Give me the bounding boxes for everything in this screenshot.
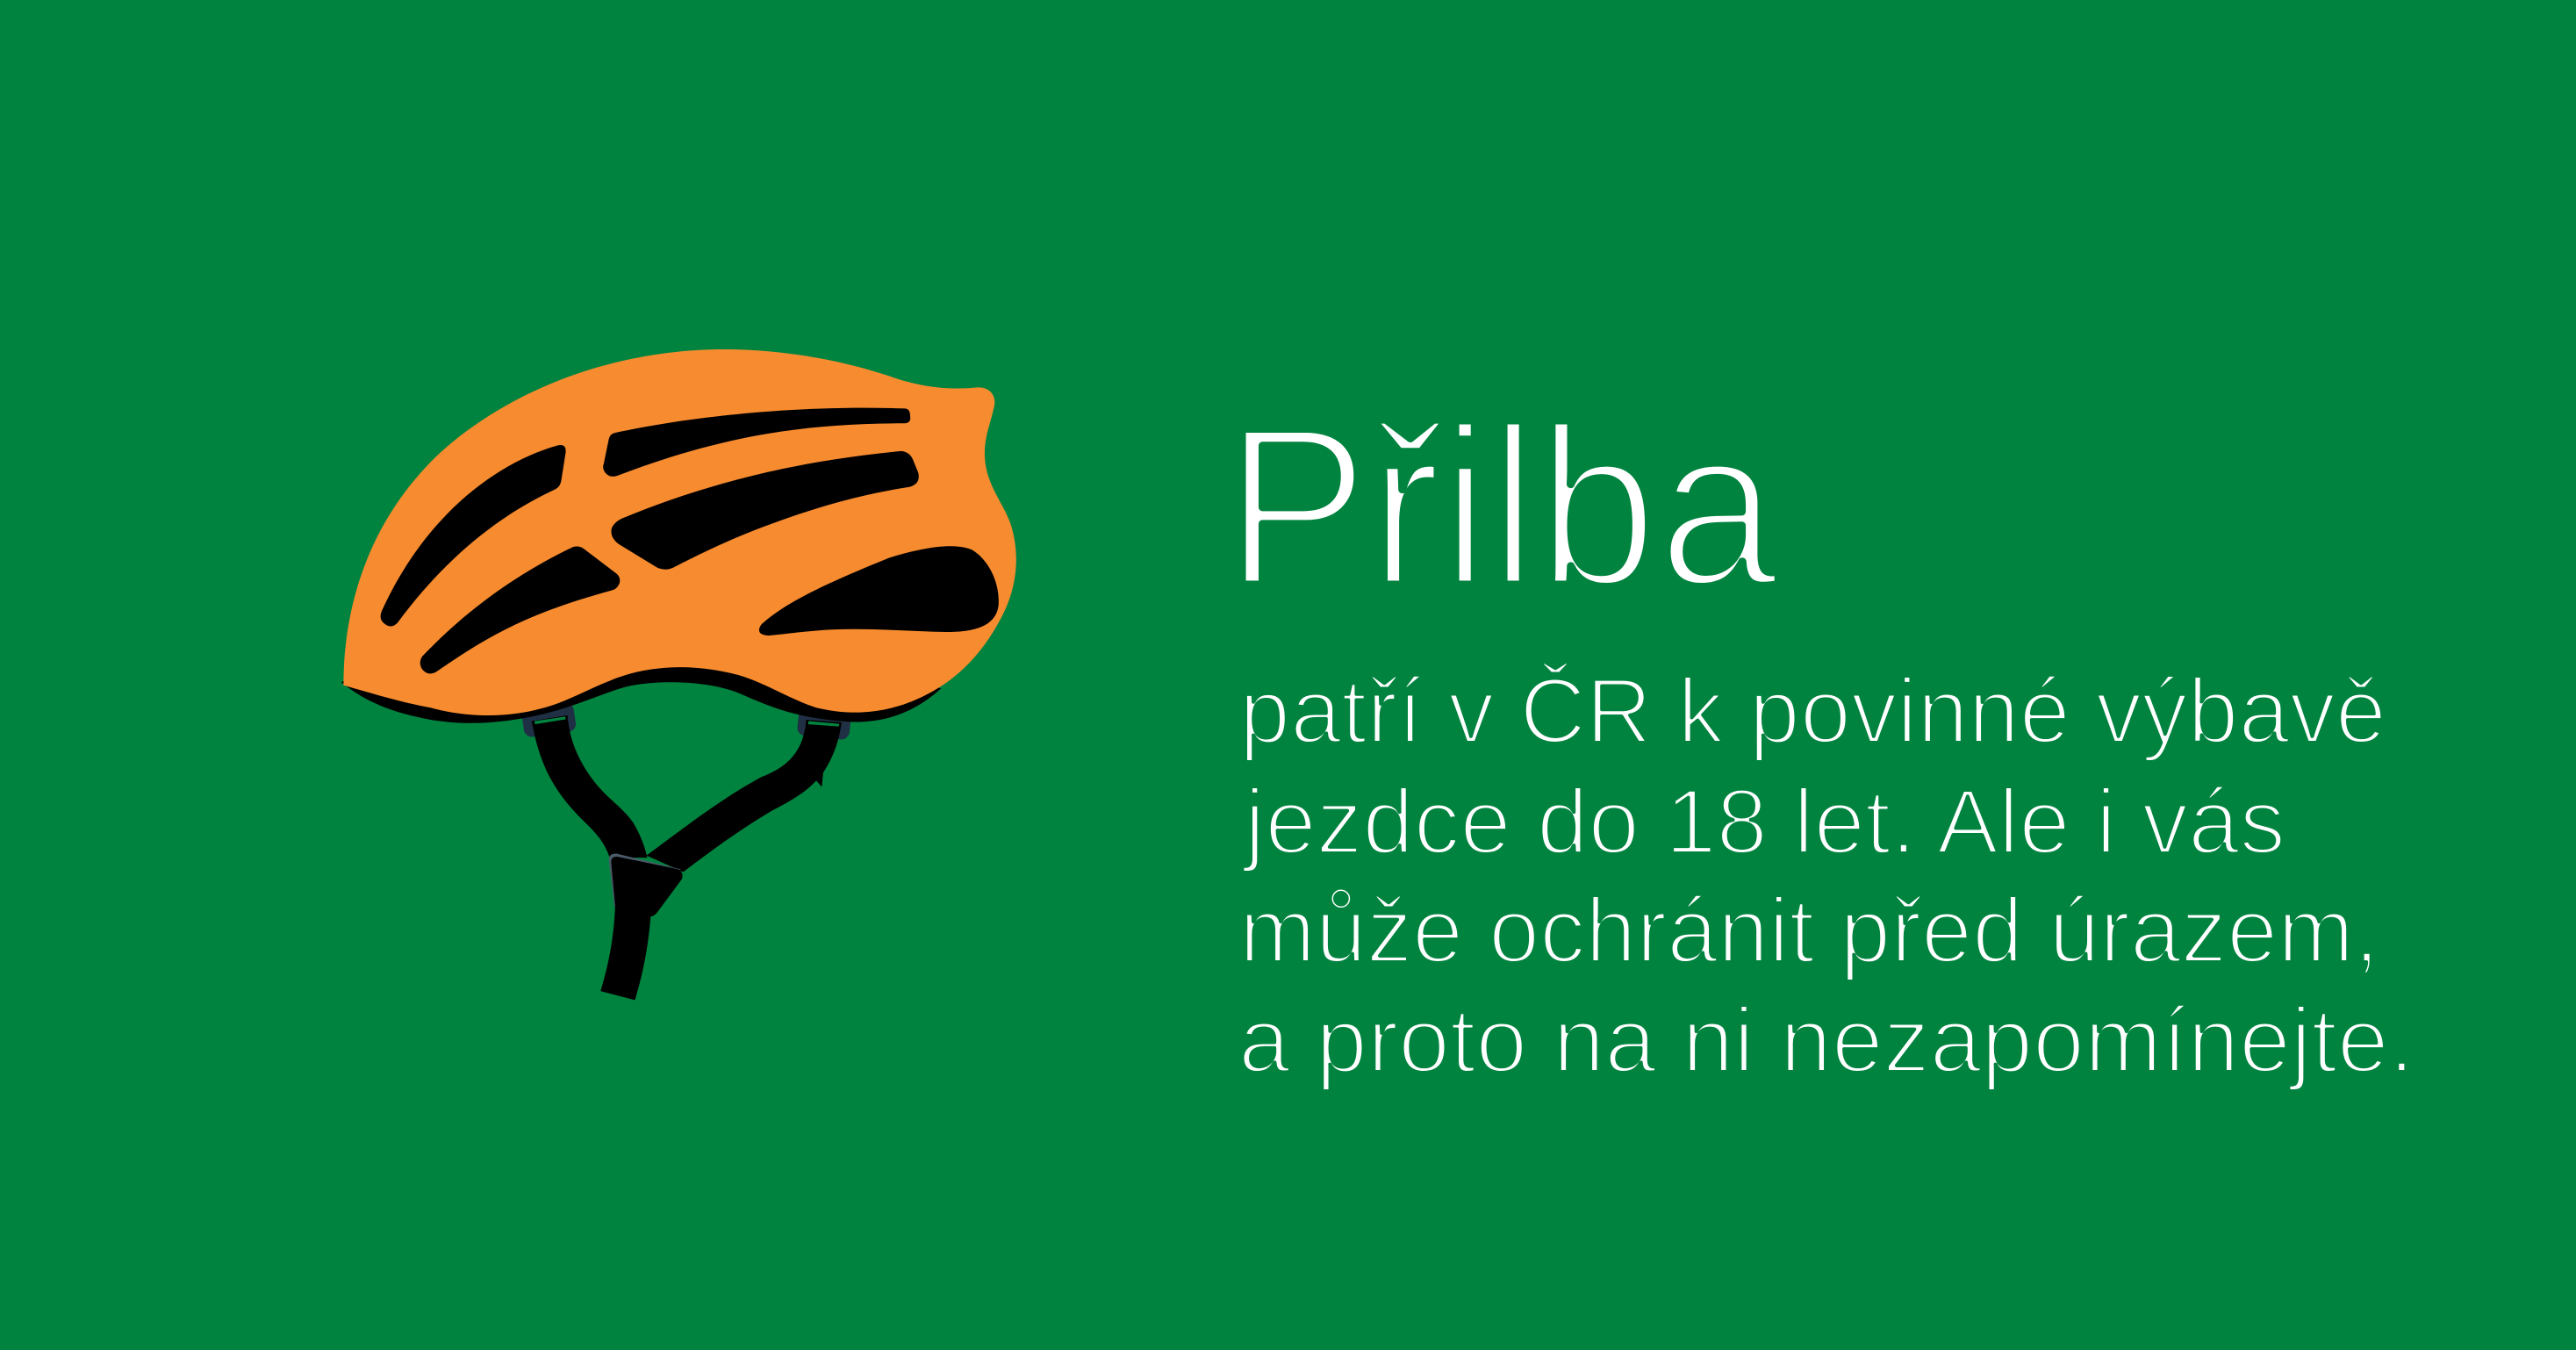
title: Přilba — [1224, 379, 1780, 633]
vent: lower left — [420, 547, 620, 673]
strap clips — [520, 702, 851, 740]
buckle highlight — [609, 854, 681, 907]
body text — [1238, 660, 2415, 1092]
strap slits — [535, 716, 839, 727]
line 2: jezdce do 18 let. Ale i vás — [1242, 771, 2285, 873]
vent: middle — [611, 451, 919, 570]
orange shell — [343, 349, 1016, 715]
line 1: patří v ČR k povinné výbavě — [1239, 660, 2386, 763]
vent: upper left — [381, 445, 566, 627]
left strap — [532, 715, 648, 858]
line 3: může ochránit před úrazem, — [1239, 880, 2379, 982]
lower chin strap — [600, 902, 651, 1000]
line 4: a proto na ni nezapomínejte. — [1238, 989, 2415, 1092]
icon: bicycle helmet — [341, 349, 1016, 1000]
vent: right — [759, 546, 999, 636]
vent: top — [603, 408, 910, 477]
buckle — [611, 857, 683, 916]
right strap — [647, 720, 842, 872]
helmet underside rim — [341, 638, 941, 723]
